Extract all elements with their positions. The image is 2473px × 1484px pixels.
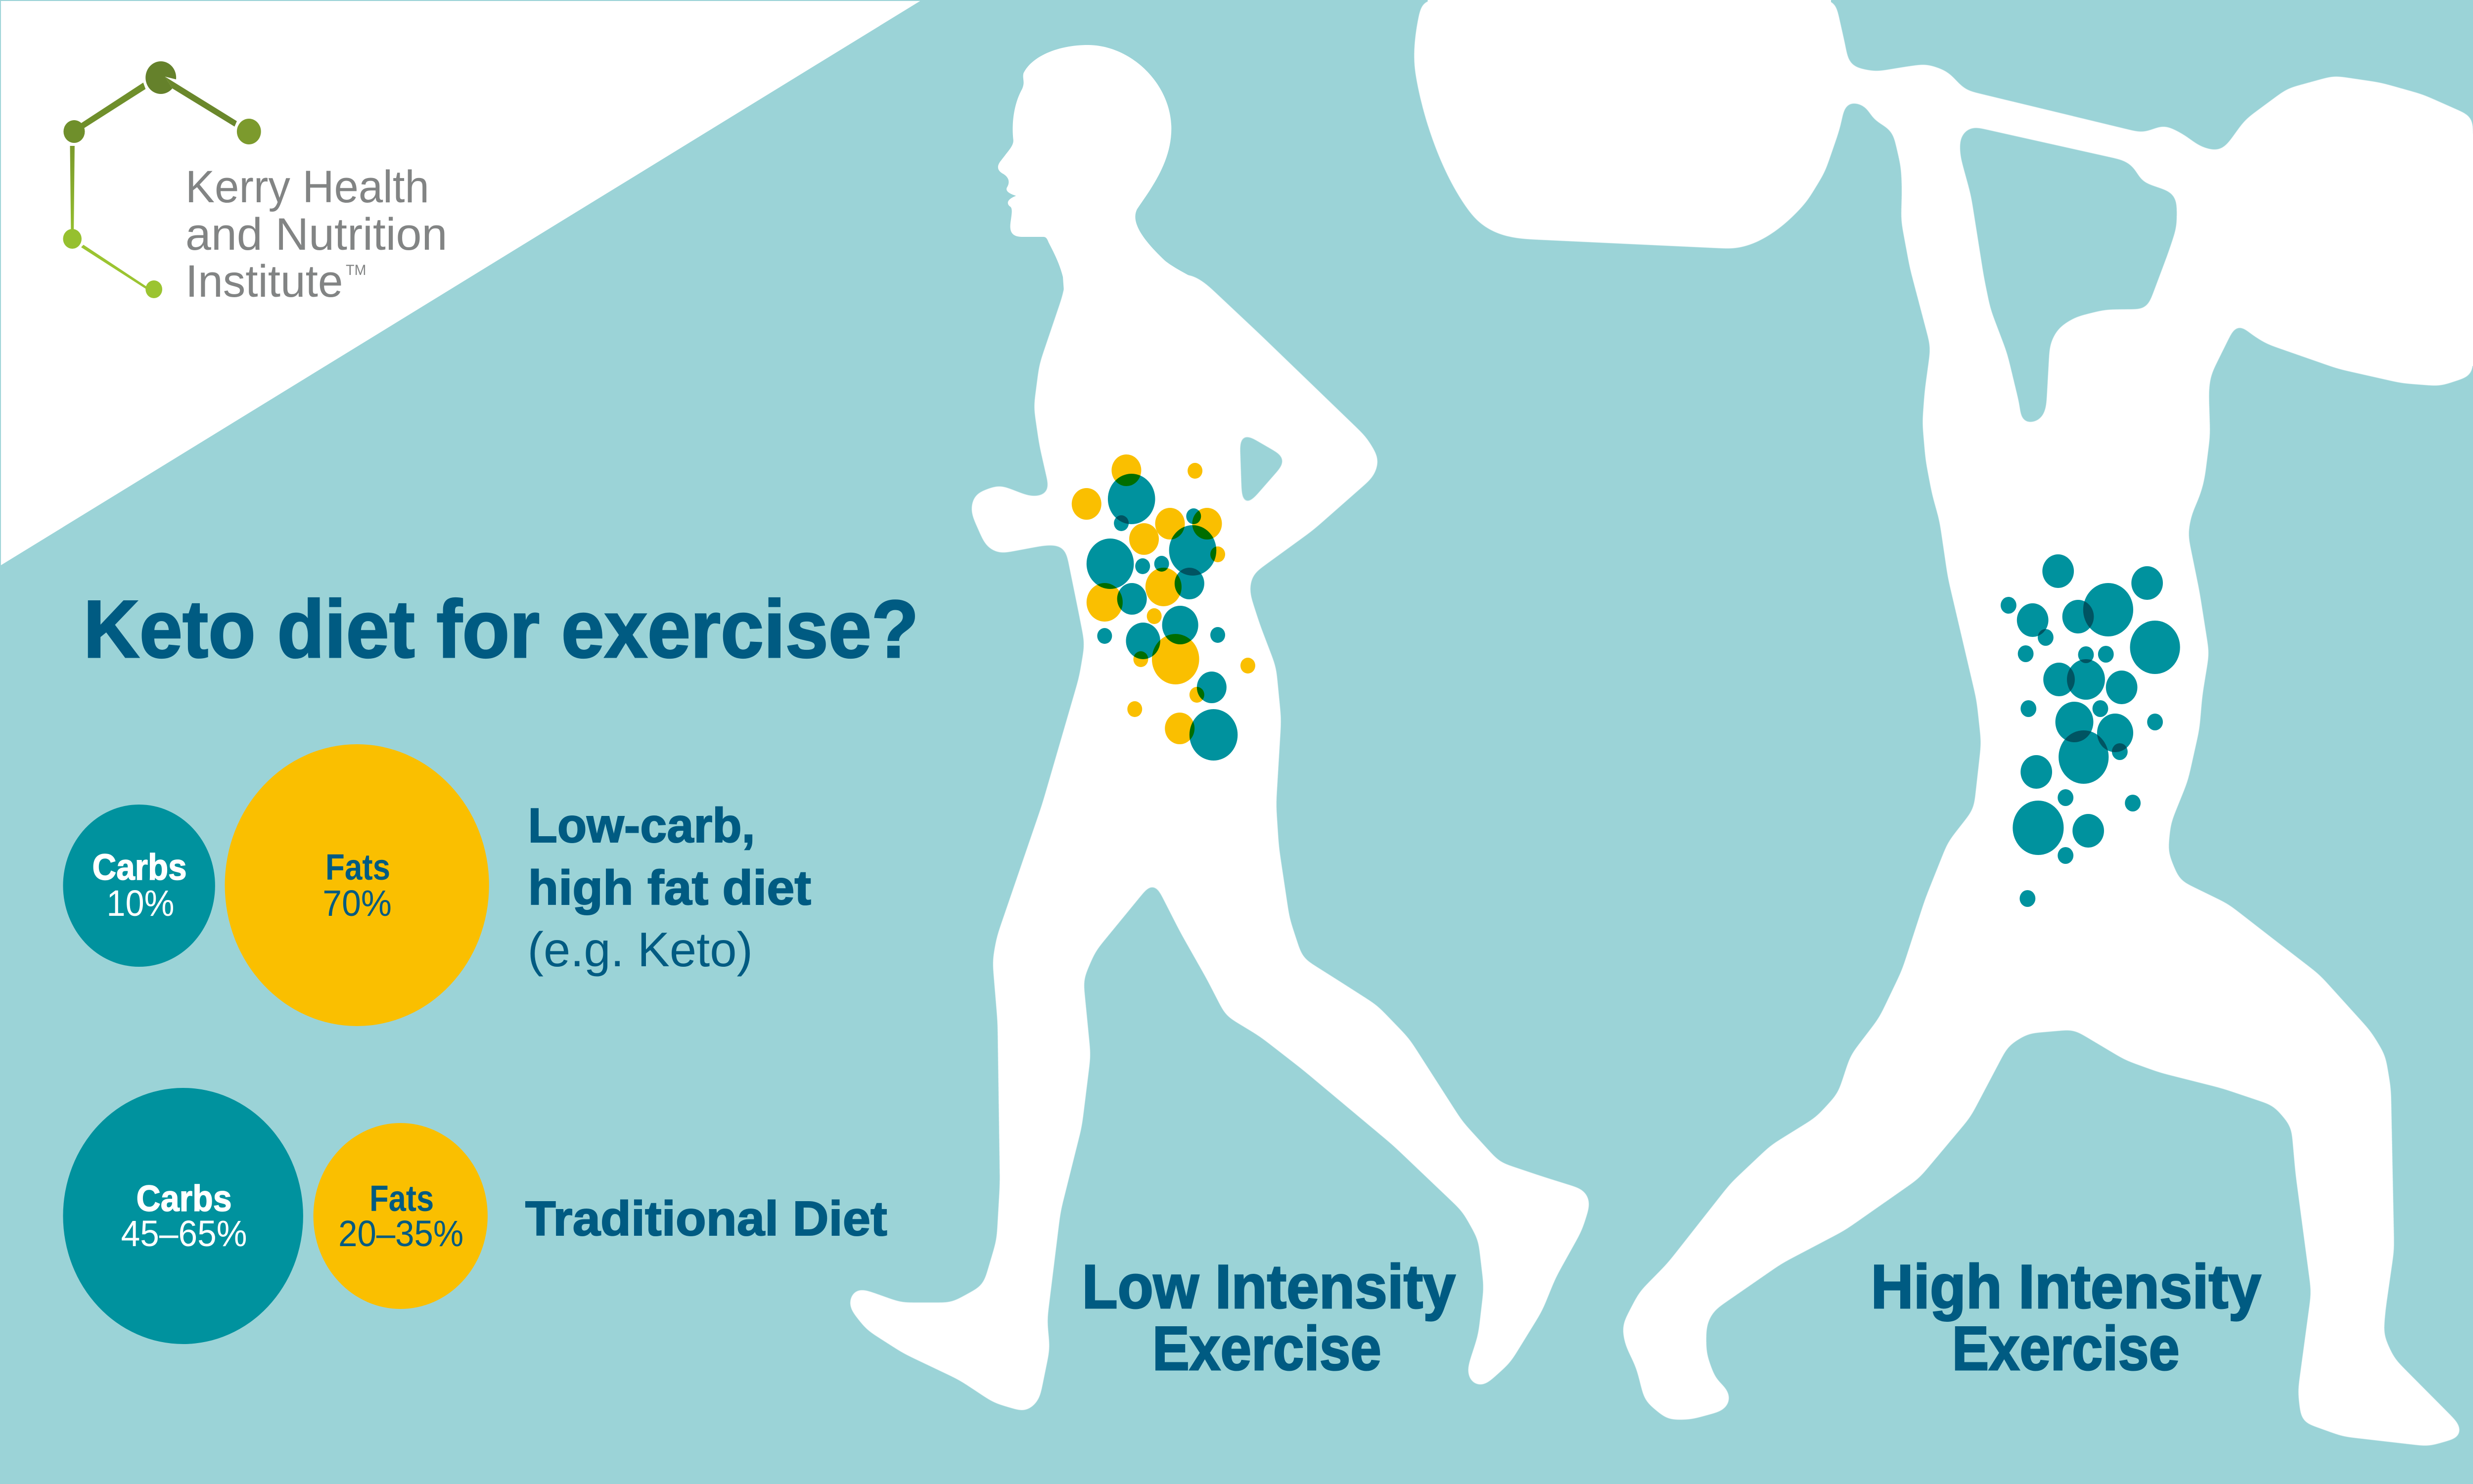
panel: low-carb high fat diet xyxy=(63,744,811,1026)
carbs circle 45-65%: 45–65% xyxy=(121,1214,247,1255)
bubbles: lifter carbs xyxy=(2001,554,2180,907)
fats circle 20-35%: 20–35% xyxy=(338,1214,463,1255)
fats circle 70%: Fats xyxy=(325,847,390,888)
logo wordmark: Kerry Health xyxy=(185,161,429,212)
heading: low intensity exercise: Low Intensity xyxy=(1082,1252,1456,1321)
heading: low intensity exercise: Exercise xyxy=(1152,1313,1381,1383)
carbs circle 45-65%: Carbs xyxy=(137,1178,232,1219)
carbs circle 10%: Carbs xyxy=(92,847,187,888)
carbs circle 45-65% xyxy=(63,1088,303,1344)
label: low-carb diet xyxy=(528,799,811,977)
heading: high intensity exercise xyxy=(1871,1252,2261,1383)
heading: high intensity exercise: High Intensity xyxy=(1871,1252,2261,1321)
carbs circle 10% xyxy=(63,805,215,967)
logo: Kerry Health and Nutrition Institute xyxy=(63,61,447,307)
fats circle 20-35% xyxy=(314,1123,488,1309)
logo wordmark: and Nutrition xyxy=(185,208,447,260)
fats circle 20-35%: Fats xyxy=(369,1178,434,1219)
bubbles: runner fat and carb mix xyxy=(1072,454,1255,761)
label: low-carb diet: (e.g. Keto) xyxy=(528,923,753,977)
silhouette: runner xyxy=(848,45,1591,1412)
panel: traditional diet xyxy=(63,1088,887,1344)
logo wordmark: TM xyxy=(346,262,366,278)
white corner triangle xyxy=(1,1,920,565)
label: traditional diet: Traditional Diet xyxy=(525,1192,887,1246)
fats circle 70% xyxy=(225,744,489,1026)
logo wordmark: Institute xyxy=(185,255,343,307)
label: low-carb diet: high fat diet xyxy=(528,861,811,915)
fats circle 70%: 70% xyxy=(322,883,392,924)
carbs circle 10%: 10% xyxy=(107,883,174,924)
title: Keto diet for exercise? xyxy=(84,583,919,675)
silhouette: weightlifter xyxy=(1414,0,2473,1446)
label: low-carb diet: Low-carb, xyxy=(528,799,755,853)
heading: high intensity exercise: Exercise xyxy=(1952,1313,2180,1383)
heading: low intensity exercise xyxy=(1082,1252,1456,1383)
logo wordmark xyxy=(185,161,447,307)
icon: molecule chain xyxy=(63,61,261,298)
